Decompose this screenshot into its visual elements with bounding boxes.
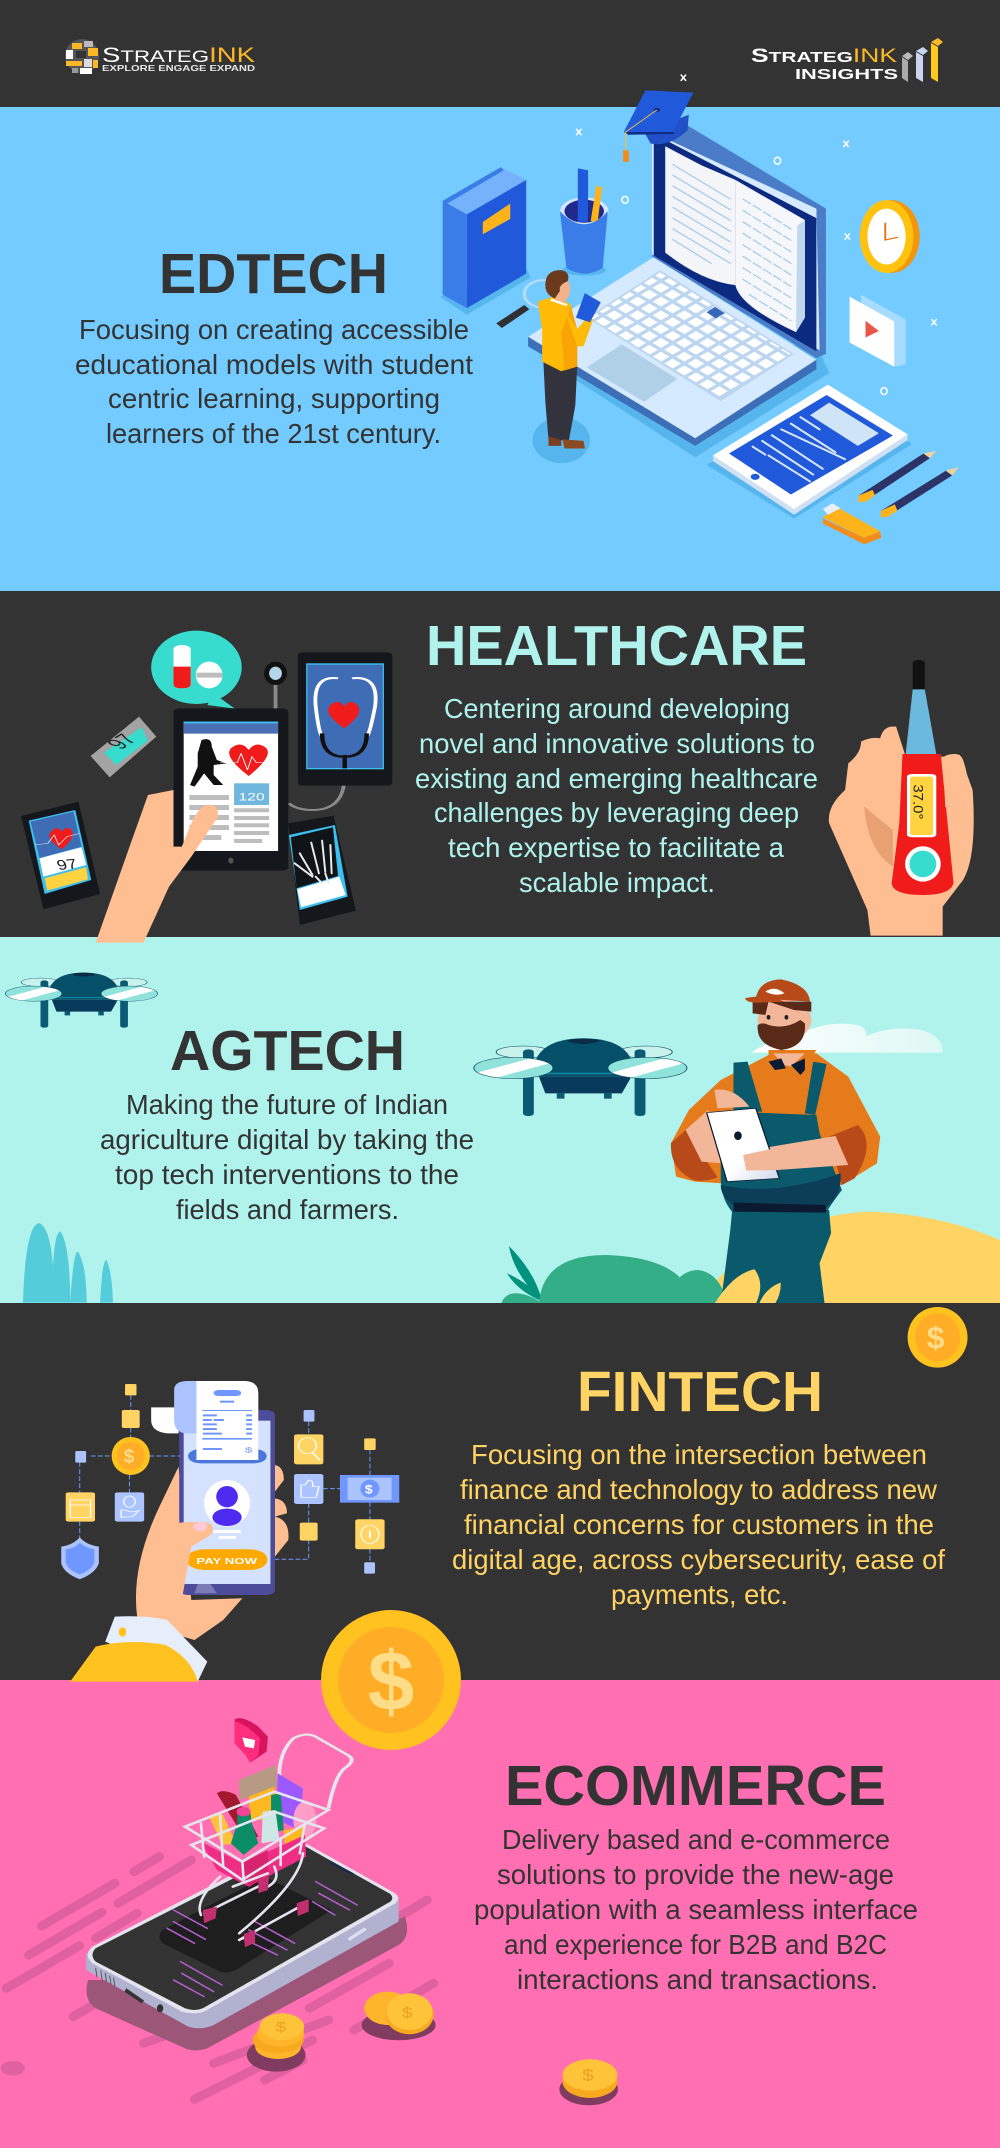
icon: single coin: $	[582, 2066, 594, 2084]
text block: agtech description: Making the future of Indian	[126, 1089, 448, 1120]
heading: ecommerce: ECOMMERCE	[505, 1754, 886, 1818]
icon: coin pair	[362, 1992, 436, 2040]
icon: book	[440, 167, 531, 315]
text block: ecommerce description: Delivery based and e-commerce	[502, 1824, 890, 1855]
illustration: farmer, drones and plants	[5, 973, 1000, 1304]
icon: single coin	[559, 2059, 618, 2105]
illustration: phone, shopping cart and coins	[1, 1718, 618, 2105]
icon: smartphone	[86, 1840, 407, 2050]
text block: healthcare description	[415, 693, 818, 898]
text block: fintech description: digital age, across cybersecurity, ease of	[452, 1544, 945, 1575]
icon: hand holding tablet	[96, 790, 218, 943]
icon: sparkles	[577, 75, 936, 395]
icon: hand with thermometer	[829, 660, 974, 936]
icon: tablet	[707, 385, 912, 519]
insights label: INSIGHTS	[795, 66, 898, 83]
insights wordmark: S TRATEG INK	[751, 46, 897, 67]
background motion stripes	[6, 1857, 434, 2099]
icon: patient tablet	[173, 708, 288, 871]
panel: healthcare	[0, 591, 1000, 943]
panel: ecommerce	[0, 1680, 1000, 2148]
icon: cloud	[751, 1024, 943, 1053]
icon: coin stack: $	[276, 2019, 287, 2035]
text block: healthcare description: novel and innovative solutions to	[419, 728, 815, 759]
icon: info	[355, 1519, 385, 1549]
icon: heart rate phone	[21, 802, 100, 909]
text block: healthcare description: challenges by leveraging deep	[434, 797, 799, 828]
icon: dollar coin: $	[124, 1447, 135, 1468]
heading: agtech: AGTECH	[170, 1019, 405, 1083]
text block: healthcare description: scalable impact.	[519, 867, 715, 898]
payment icons	[61, 1384, 399, 1579]
icon: thumb over phone	[147, 1522, 213, 1600]
panel: edtech	[0, 75, 1000, 591]
icon: banknote	[340, 1475, 399, 1503]
illustration: laptop, student and study items	[440, 75, 959, 544]
text block: fintech description: Focusing on the intersection between	[471, 1439, 927, 1470]
pay now button: PAY NOW	[196, 1557, 258, 1566]
icon: laptop	[528, 124, 829, 457]
icon: rising bars	[902, 38, 943, 82]
icon: pill speech bubble	[151, 631, 242, 709]
icon: coin stack	[247, 2013, 306, 2072]
icon: hill	[695, 1212, 1000, 1304]
illustration: mobile payment	[61, 1307, 968, 1682]
text block: ecommerce description: population with a seamless interface	[474, 1894, 918, 1925]
icon: farmer	[671, 979, 880, 1304]
text block: agtech description: agriculture digital by taking the	[100, 1124, 474, 1155]
logo wordmark: S TRATEG INK	[102, 44, 255, 67]
icon: large dollar coin	[321, 1610, 461, 1750]
heading: edtech: EDTECH	[159, 242, 388, 306]
icon: pencils	[858, 451, 959, 517]
icon: shopping cart	[185, 1735, 352, 1947]
icon: large drone	[474, 1038, 687, 1116]
header bar	[0, 0, 1000, 107]
icon: hand holding phone	[70, 1465, 288, 1682]
logo: StrategINK Insights	[751, 38, 943, 83]
icon: glucose meter	[91, 717, 156, 777]
text block: agtech description: top tech interventions to the	[115, 1159, 459, 1190]
icon: large dollar coin: $	[368, 1634, 414, 1728]
icon: student	[496, 270, 601, 463]
icon: usb drive	[823, 503, 881, 544]
icon: stethoscope tablet	[289, 652, 392, 810]
icon: small drone	[5, 973, 158, 1028]
heading: fintech: FINTECH	[577, 1360, 823, 1424]
icon: top right coin	[908, 1307, 968, 1368]
icon: coin pair: $	[402, 2003, 413, 2021]
icon: receipt: $	[245, 1446, 254, 1454]
illustration: medical devices and hands	[21, 631, 974, 943]
text block: fintech description: finance and technology to address new	[460, 1474, 938, 1505]
icon: graduation cap	[623, 90, 693, 162]
icon: thumbs up	[294, 1474, 323, 1504]
text block: fintech description	[452, 1439, 945, 1610]
heading: healthcare: HEALTHCARE	[426, 614, 807, 678]
icon: shield	[61, 1537, 99, 1579]
icon: glucose meter: 97	[101, 731, 143, 752]
text block: agtech description: fields and farmers.	[176, 1194, 399, 1225]
icon: video card	[850, 295, 906, 367]
text block: ecommerce description	[474, 1824, 918, 1995]
logo tagline: EXPLORE ENGAGE EXPAND	[102, 63, 255, 73]
icon: clock	[860, 200, 920, 273]
icon: x-ray phone	[288, 816, 356, 925]
icon: shop location tag	[235, 1718, 268, 1763]
text block: healthcare description: tech expertise to facilitate a	[448, 832, 784, 863]
text block: edtech description: Focusing on creating accessible	[79, 314, 469, 345]
icon: heart rate phone: 97	[55, 856, 79, 873]
icon: magnifier	[294, 1434, 323, 1464]
icon: pen cup	[560, 168, 608, 276]
icon: bushes	[501, 1246, 727, 1304]
icon: patient tablet: 120	[239, 790, 265, 803]
icon: top right coin: $	[927, 1319, 945, 1355]
text block: agtech description	[100, 1089, 474, 1225]
text block: edtech description: learners of the 21st century.	[106, 418, 441, 449]
text block: edtech description: centric learning, supporting	[108, 383, 440, 414]
icon: calendar	[66, 1492, 95, 1522]
text block: edtech description: educational models with student	[75, 349, 473, 380]
text block: edtech description	[75, 314, 473, 449]
text block: healthcare description: Centering around developing	[444, 693, 790, 724]
panel: fintech	[0, 1303, 1000, 1750]
text block: ecommerce description: and experience for B2B and B2C	[504, 1929, 887, 1960]
text block: ecommerce description: interactions and transactions.	[517, 1964, 878, 1995]
text block: fintech description: payments, etc.	[611, 1579, 788, 1610]
text block: fintech description: financial concerns for customers in the	[464, 1509, 934, 1540]
icon: dollar coin	[112, 1437, 150, 1475]
connector lines	[80, 1395, 370, 1562]
icon: thumbnail	[193, 1522, 207, 1531]
icon: stethoscope head	[264, 662, 287, 710]
icon: grass blades	[23, 1223, 113, 1303]
logo: StrategINK	[65, 39, 255, 74]
pay now button	[187, 1549, 267, 1570]
icon: hand with coin	[115, 1492, 144, 1522]
text block: healthcare description: existing and emerging healthcare	[415, 763, 818, 794]
text block: ecommerce description: solutions to provide the new-age	[497, 1859, 894, 1890]
icon: hand with thermometer: 37.0°	[910, 784, 925, 819]
panel: agtech	[0, 937, 1000, 1304]
icon: banknote: $	[365, 1482, 373, 1496]
icon: receipt	[151, 1381, 258, 1460]
icon: puzzle globe	[65, 39, 99, 74]
icon: phone	[179, 1410, 275, 1595]
